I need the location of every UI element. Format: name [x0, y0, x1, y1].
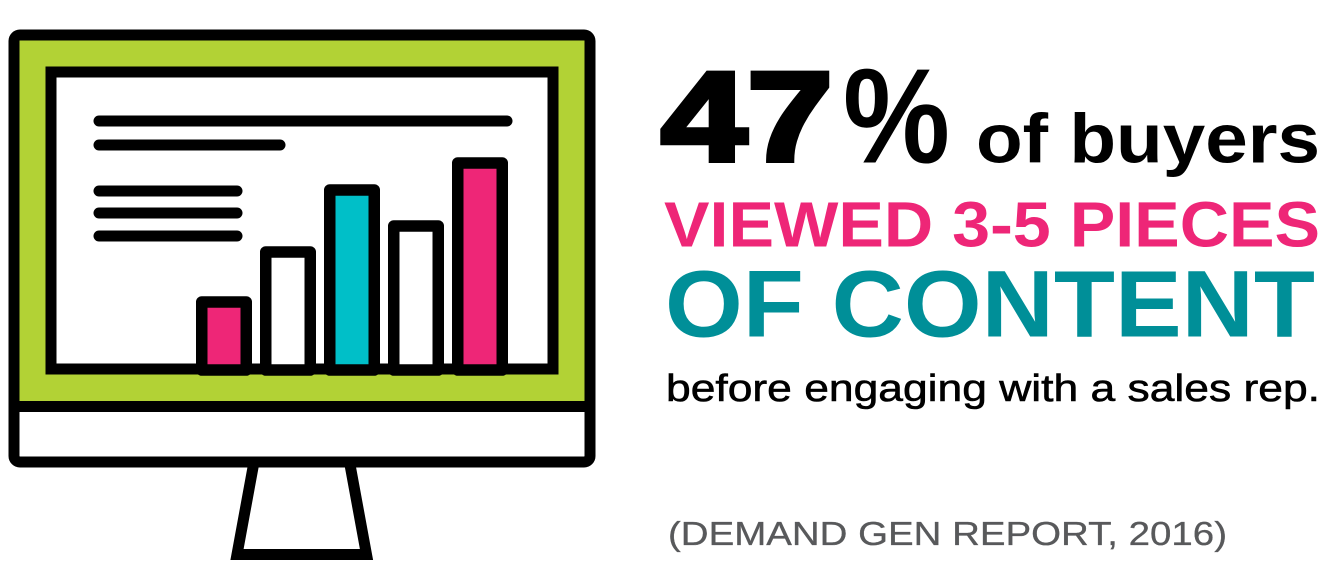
monitor body — [14, 35, 590, 462]
subheading: before engaging: before engaging with a sales rep. — [666, 368, 1320, 410]
screen — [51, 72, 553, 369]
headline: 47% of buyers — [661, 40, 1320, 192]
headline: of content: OF CONTENT — [665, 252, 1315, 358]
document text lines — [99, 121, 507, 236]
icon: computer monitor with bar chart — [14, 35, 590, 554]
source citation: (DEMAND GEN REPORT, 2016) — [668, 515, 1227, 552]
monitor stand — [237, 462, 366, 554]
headline: 47% of buyers: 47 — [661, 46, 833, 188]
headline: 47% of buyers: % — [843, 40, 950, 192]
headline: viewed 3-5 pieces: VIEWED 3-5 PIECES — [664, 188, 1320, 260]
bar chart — [202, 163, 502, 370]
headline: 47% of buyers: of buyers — [976, 100, 1320, 178]
green bezel — [20, 40, 584, 402]
